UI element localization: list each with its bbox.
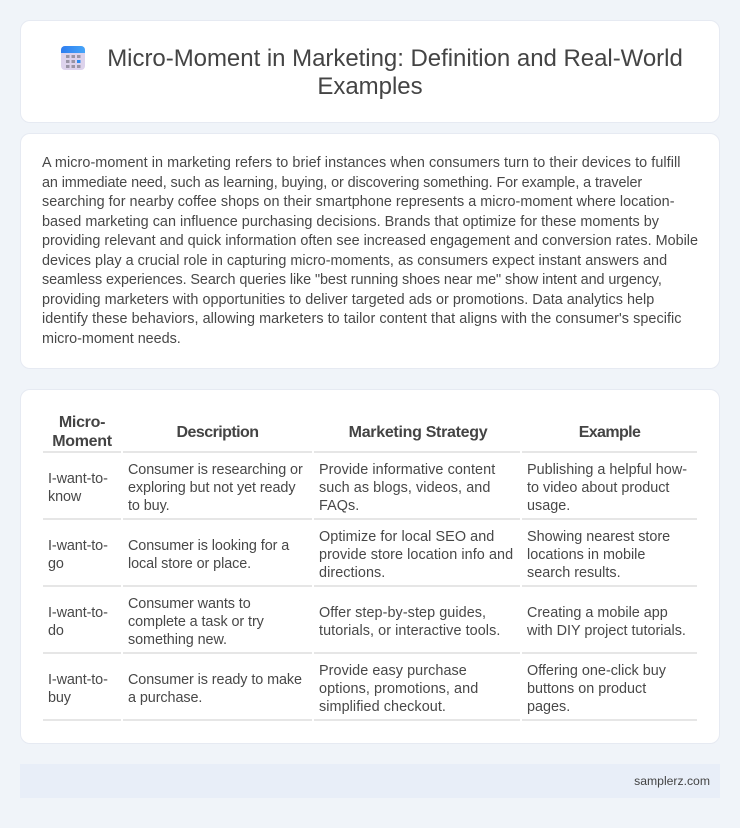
definition text: A micro-moment in marketing refers to brief instances when consumers turn to their devices to fulfill (42, 155, 681, 171)
panel: table (20, 389, 720, 744)
table row: I-want-to-know (43, 462, 697, 520)
table row: I-want-to-go: I-want-to- (48, 538, 108, 554)
definition text: devices play a crucial role in capturing micro-moments, as consumers expect instant answers and (42, 252, 667, 268)
table row: I-want-to-buy: simplified checkout. (319, 699, 446, 715)
footer text: samplerz.com (634, 774, 710, 788)
table row: I-want-to-know: to video about product (527, 480, 669, 496)
table header (43, 414, 697, 453)
table row: I-want-to-buy: I-want-to- (48, 672, 108, 688)
table row: I-want-to-do: complete a task or try (128, 614, 264, 630)
title: Examples (317, 73, 423, 100)
table row: I-want-to-do: Consumer wants to (128, 596, 251, 612)
table row: I-want-to-do: Offer step-by-step guides, (319, 605, 486, 621)
table row: I-want-to-know: know (48, 489, 81, 505)
table row: I-want-to-know: Provide informative content (319, 462, 495, 478)
table row: I-want-to-know: Publishing a helpful how- (527, 462, 687, 478)
table row: I-want-to-know: to buy. (128, 498, 170, 514)
title: Micro-Moment in Marketing: Definition and Real-World (107, 45, 683, 72)
table row: I-want-to-know: Consumer is researching or (128, 462, 303, 478)
definition text: providing relevant and quick information often see increased engagement and conversion rates. Mobile (42, 233, 698, 249)
definition text: searching for nearby coffee shops on their smartphone represents a micro-moment where location- (42, 194, 675, 210)
table row: I-want-to-do: something new. (128, 632, 227, 648)
table row: I-want-to-buy: buy (48, 690, 71, 706)
table row: I-want-to-buy: a purchase. (128, 690, 202, 706)
definition text: seamless experiences. Search queries like "best running shoes near me" show intent and urgency, (42, 272, 662, 288)
table header: Micro- (59, 414, 105, 431)
table row: I-want-to-do: with DIY project tutorials. (527, 623, 686, 639)
table row: I-want-to-go: provide store location info and (319, 547, 513, 563)
table row: I-want-to-go: locations in mobile (527, 547, 645, 563)
definition text (42, 155, 698, 346)
table row: I-want-to-buy (43, 663, 697, 721)
table header: Description (177, 424, 258, 441)
title (107, 45, 683, 100)
table row: I-want-to-go: local store or place. (128, 556, 251, 572)
table row: I-want-to-go (43, 529, 697, 587)
table row: I-want-to-go: go (48, 556, 64, 572)
icon: calendar (61, 46, 85, 70)
table row: I-want-to-do (43, 596, 697, 654)
table row: I-want-to-buy: buttons on product (527, 681, 646, 697)
table row: I-want-to-know: I-want-to- (48, 471, 108, 487)
definition text: based marketing can influence purchasing decisions. Brands that optimize for these moments by (42, 214, 659, 230)
table row: I-want-to-do: I-want-to- (48, 605, 108, 621)
table row: I-want-to-buy: Offering one-click buy (527, 663, 666, 679)
table row: I-want-to-buy: Consumer is ready to make (128, 672, 302, 688)
definition text: identify these behaviors, allowing marketers to tailor content that aligns with the consumer's specific (42, 311, 682, 327)
table row: I-want-to-buy: Provide easy purchase (319, 663, 467, 679)
table row: I-want-to-go: Showing nearest store (527, 529, 670, 545)
definition text: an immediate need, such as learning, buying, or discovering something. For example, a traveler (42, 174, 642, 190)
table row: I-want-to-buy: options, promotions, and (319, 681, 478, 697)
table header: Example (579, 424, 640, 441)
definition text: providing marketers with opportunities to deliver targeted ads or promotions. Data analytics help (42, 292, 654, 308)
table header: Marketing Strategy (349, 424, 487, 441)
table row: I-want-to-know: FAQs. (319, 498, 359, 514)
table row: I-want-to-do: tutorials, or interactive tools. (319, 623, 500, 639)
table row: I-want-to-know: usage. (527, 498, 570, 514)
table row: I-want-to-go: Optimize for local SEO and (319, 529, 494, 545)
table row: I-want-to-know: such as blogs, videos, and (319, 480, 490, 496)
table row: I-want-to-know: exploring but not yet ready (128, 480, 295, 496)
footer bar (20, 764, 720, 798)
panel: definition paragraph (20, 133, 720, 369)
table row: I-want-to-do: do (48, 623, 64, 639)
table header: Moment (52, 433, 112, 450)
header panel (20, 20, 720, 123)
table row: I-want-to-go: Consumer is looking for a (128, 538, 289, 554)
table row: I-want-to-go: directions. (319, 565, 385, 581)
table row: I-want-to-go: search results. (527, 565, 621, 581)
table row: I-want-to-buy: pages. (527, 699, 570, 715)
table row: I-want-to-do: Creating a mobile app (527, 605, 668, 621)
definition text: micro-moment needs. (42, 330, 181, 346)
